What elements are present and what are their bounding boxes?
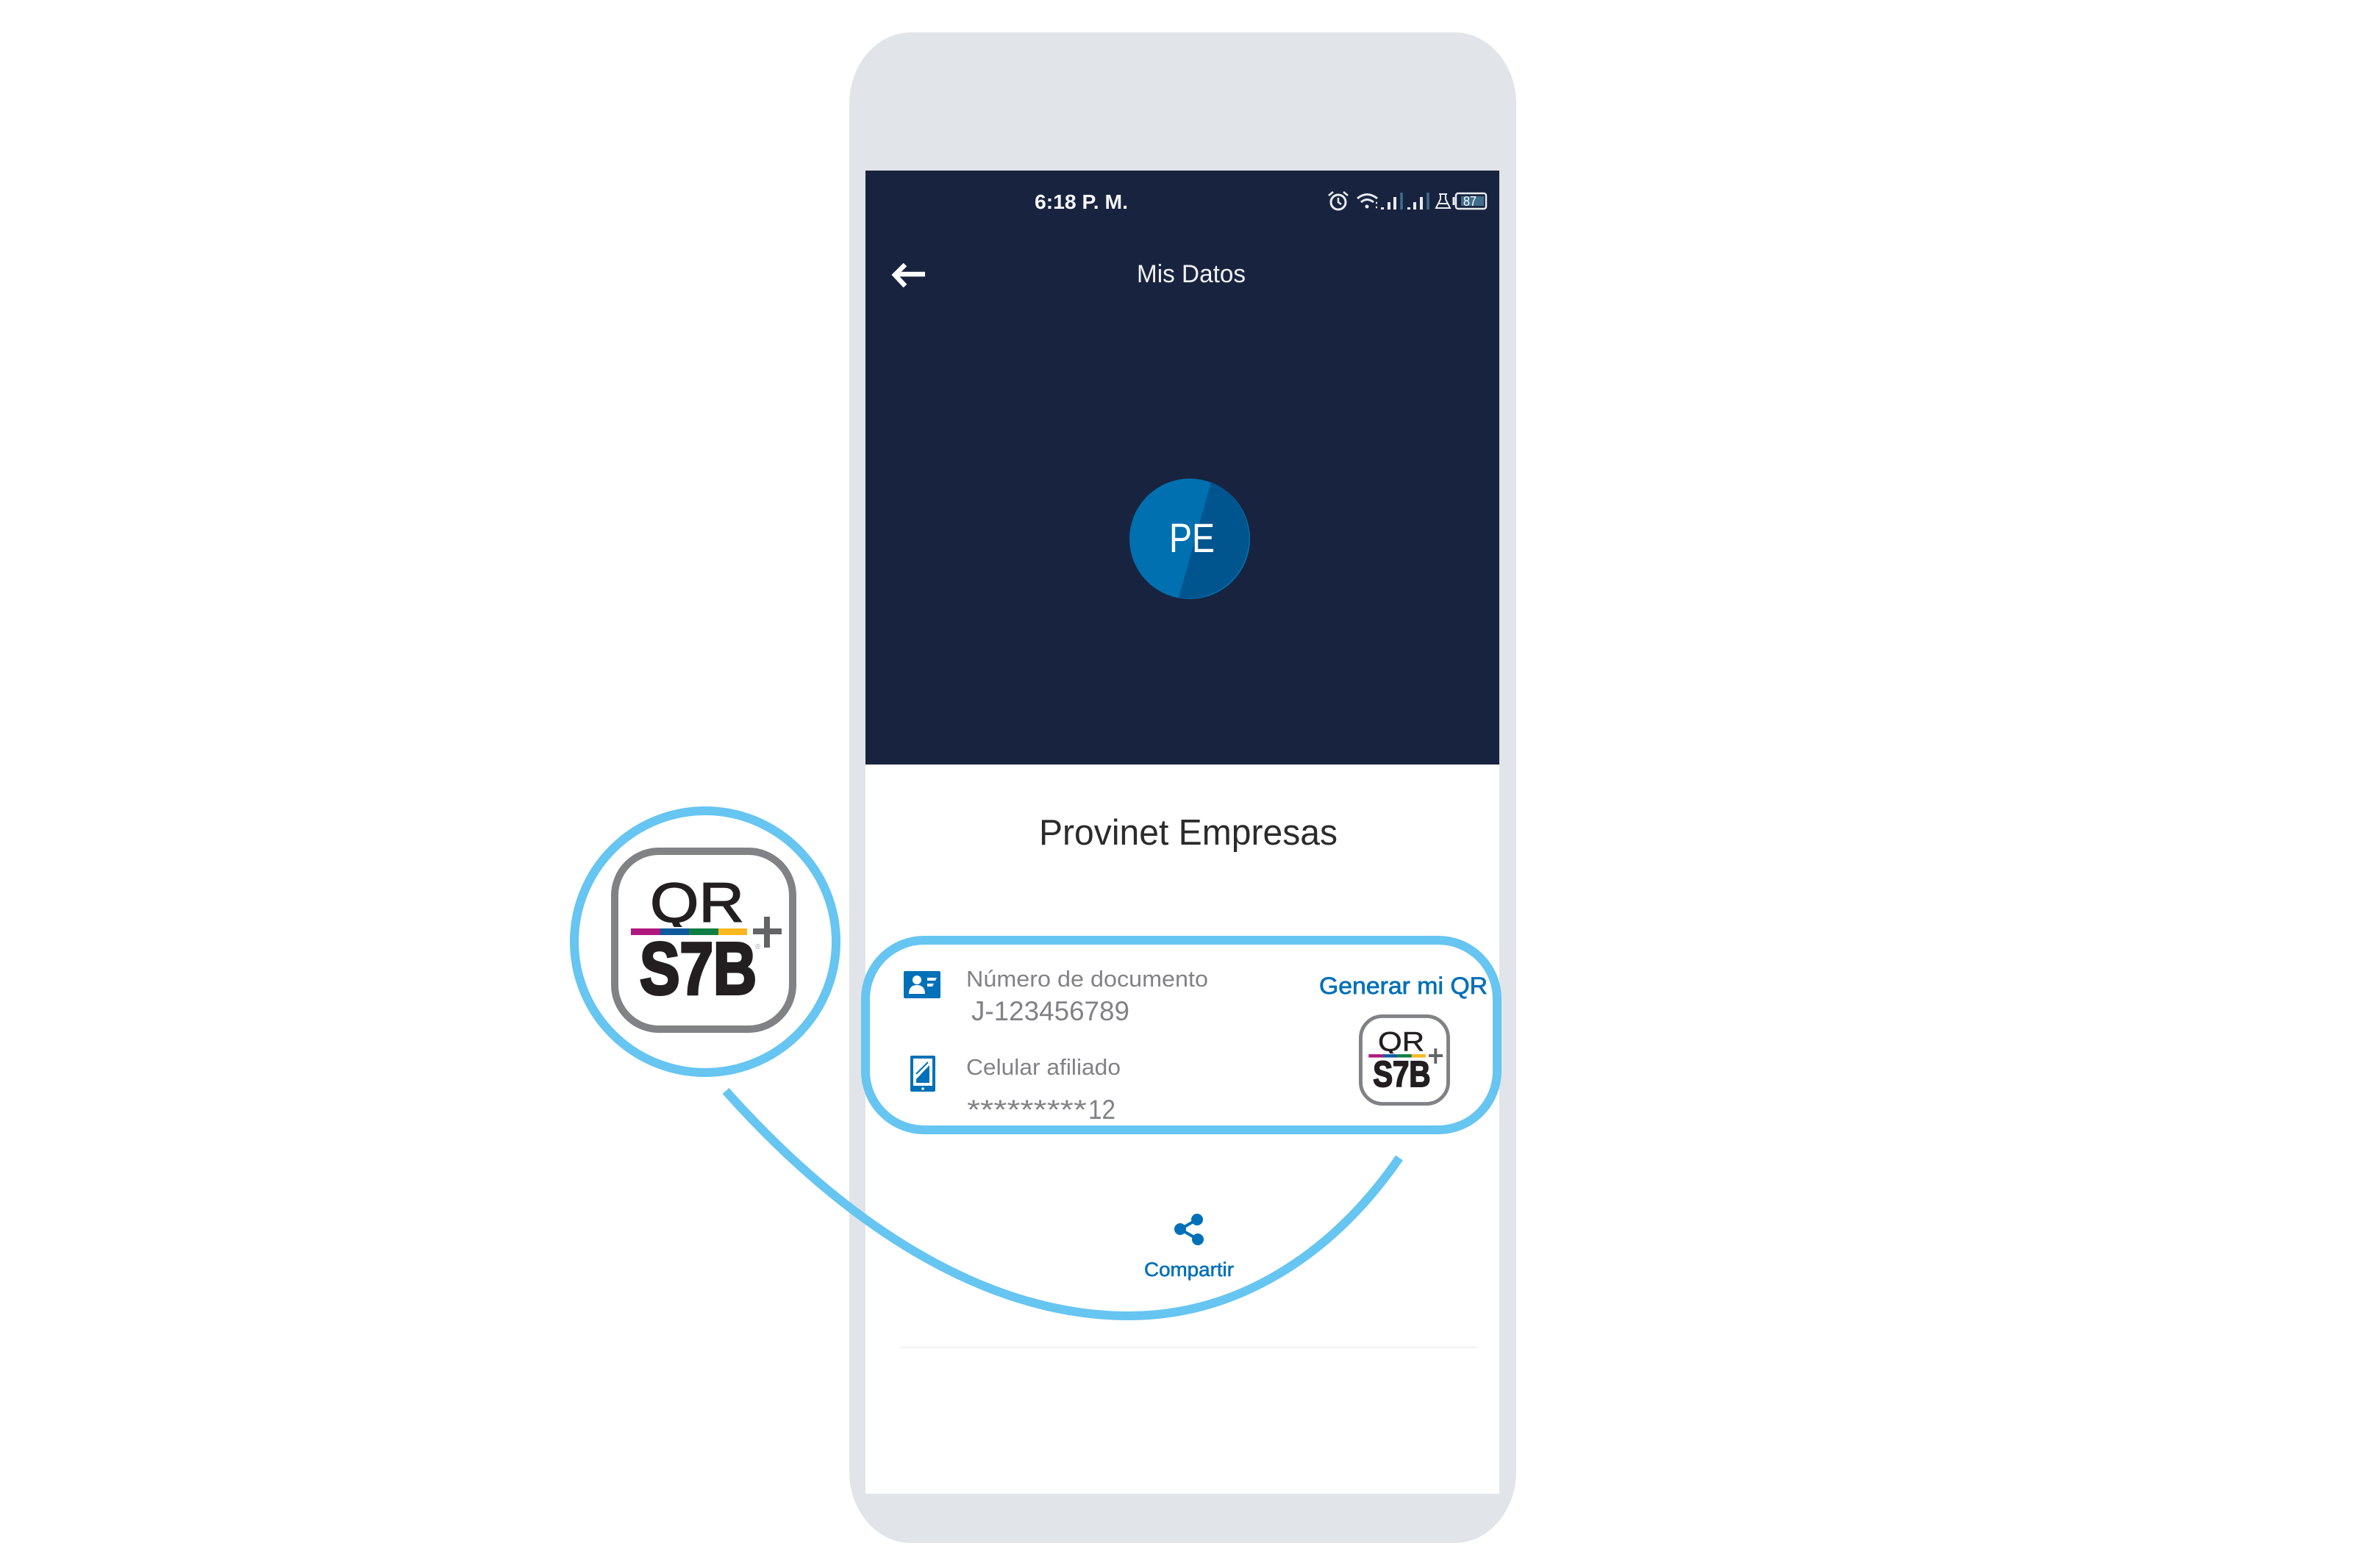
status icons [1329, 192, 1486, 210]
small QR S7B logo: S7B [1373, 1054, 1430, 1095]
phone screen [865, 171, 1499, 1494]
document number label: Número de documento [966, 966, 1208, 992]
large QR S7B logo [615, 851, 793, 1029]
affiliated phone value [967, 1095, 1115, 1125]
magnified logo callout [574, 811, 836, 1073]
status bar time: 6:18 P. M. [1035, 190, 1128, 213]
icon: mobile phone [910, 1056, 935, 1092]
phone frame [849, 32, 1516, 1543]
connector arc [726, 1091, 1399, 1316]
large QR S7B logo: S7B [640, 928, 757, 1010]
share label: Compartir [1144, 1259, 1234, 1281]
company name heading: Provinet Empresas [1039, 813, 1338, 853]
dark header panel [865, 171, 1499, 765]
large QR S7B logo: ® [755, 943, 761, 951]
affiliated phone label: Celular afiliado [966, 1054, 1121, 1080]
data card highlight [865, 940, 1497, 1130]
avatar circle [1129, 479, 1250, 599]
screen title: Mis Datos [1137, 260, 1246, 288]
small QR S7B logo: QR [1378, 1026, 1424, 1057]
avatar circle: PE [1169, 515, 1215, 561]
bottom divider [900, 1347, 1477, 1348]
document number value: J-123456789 [971, 996, 1129, 1026]
icon: share [1175, 1214, 1203, 1245]
icon: document id [904, 971, 940, 998]
back arrow icon [895, 265, 925, 286]
affiliated phone value: ********* [967, 1095, 1087, 1125]
small QR S7B logo [1360, 1016, 1449, 1104]
battery level: 87 [1463, 194, 1477, 209]
generate QR link: Generar mi QR [1319, 973, 1488, 999]
large QR S7B logo: QR [650, 872, 744, 934]
affiliated phone value: 12 [1088, 1095, 1115, 1125]
